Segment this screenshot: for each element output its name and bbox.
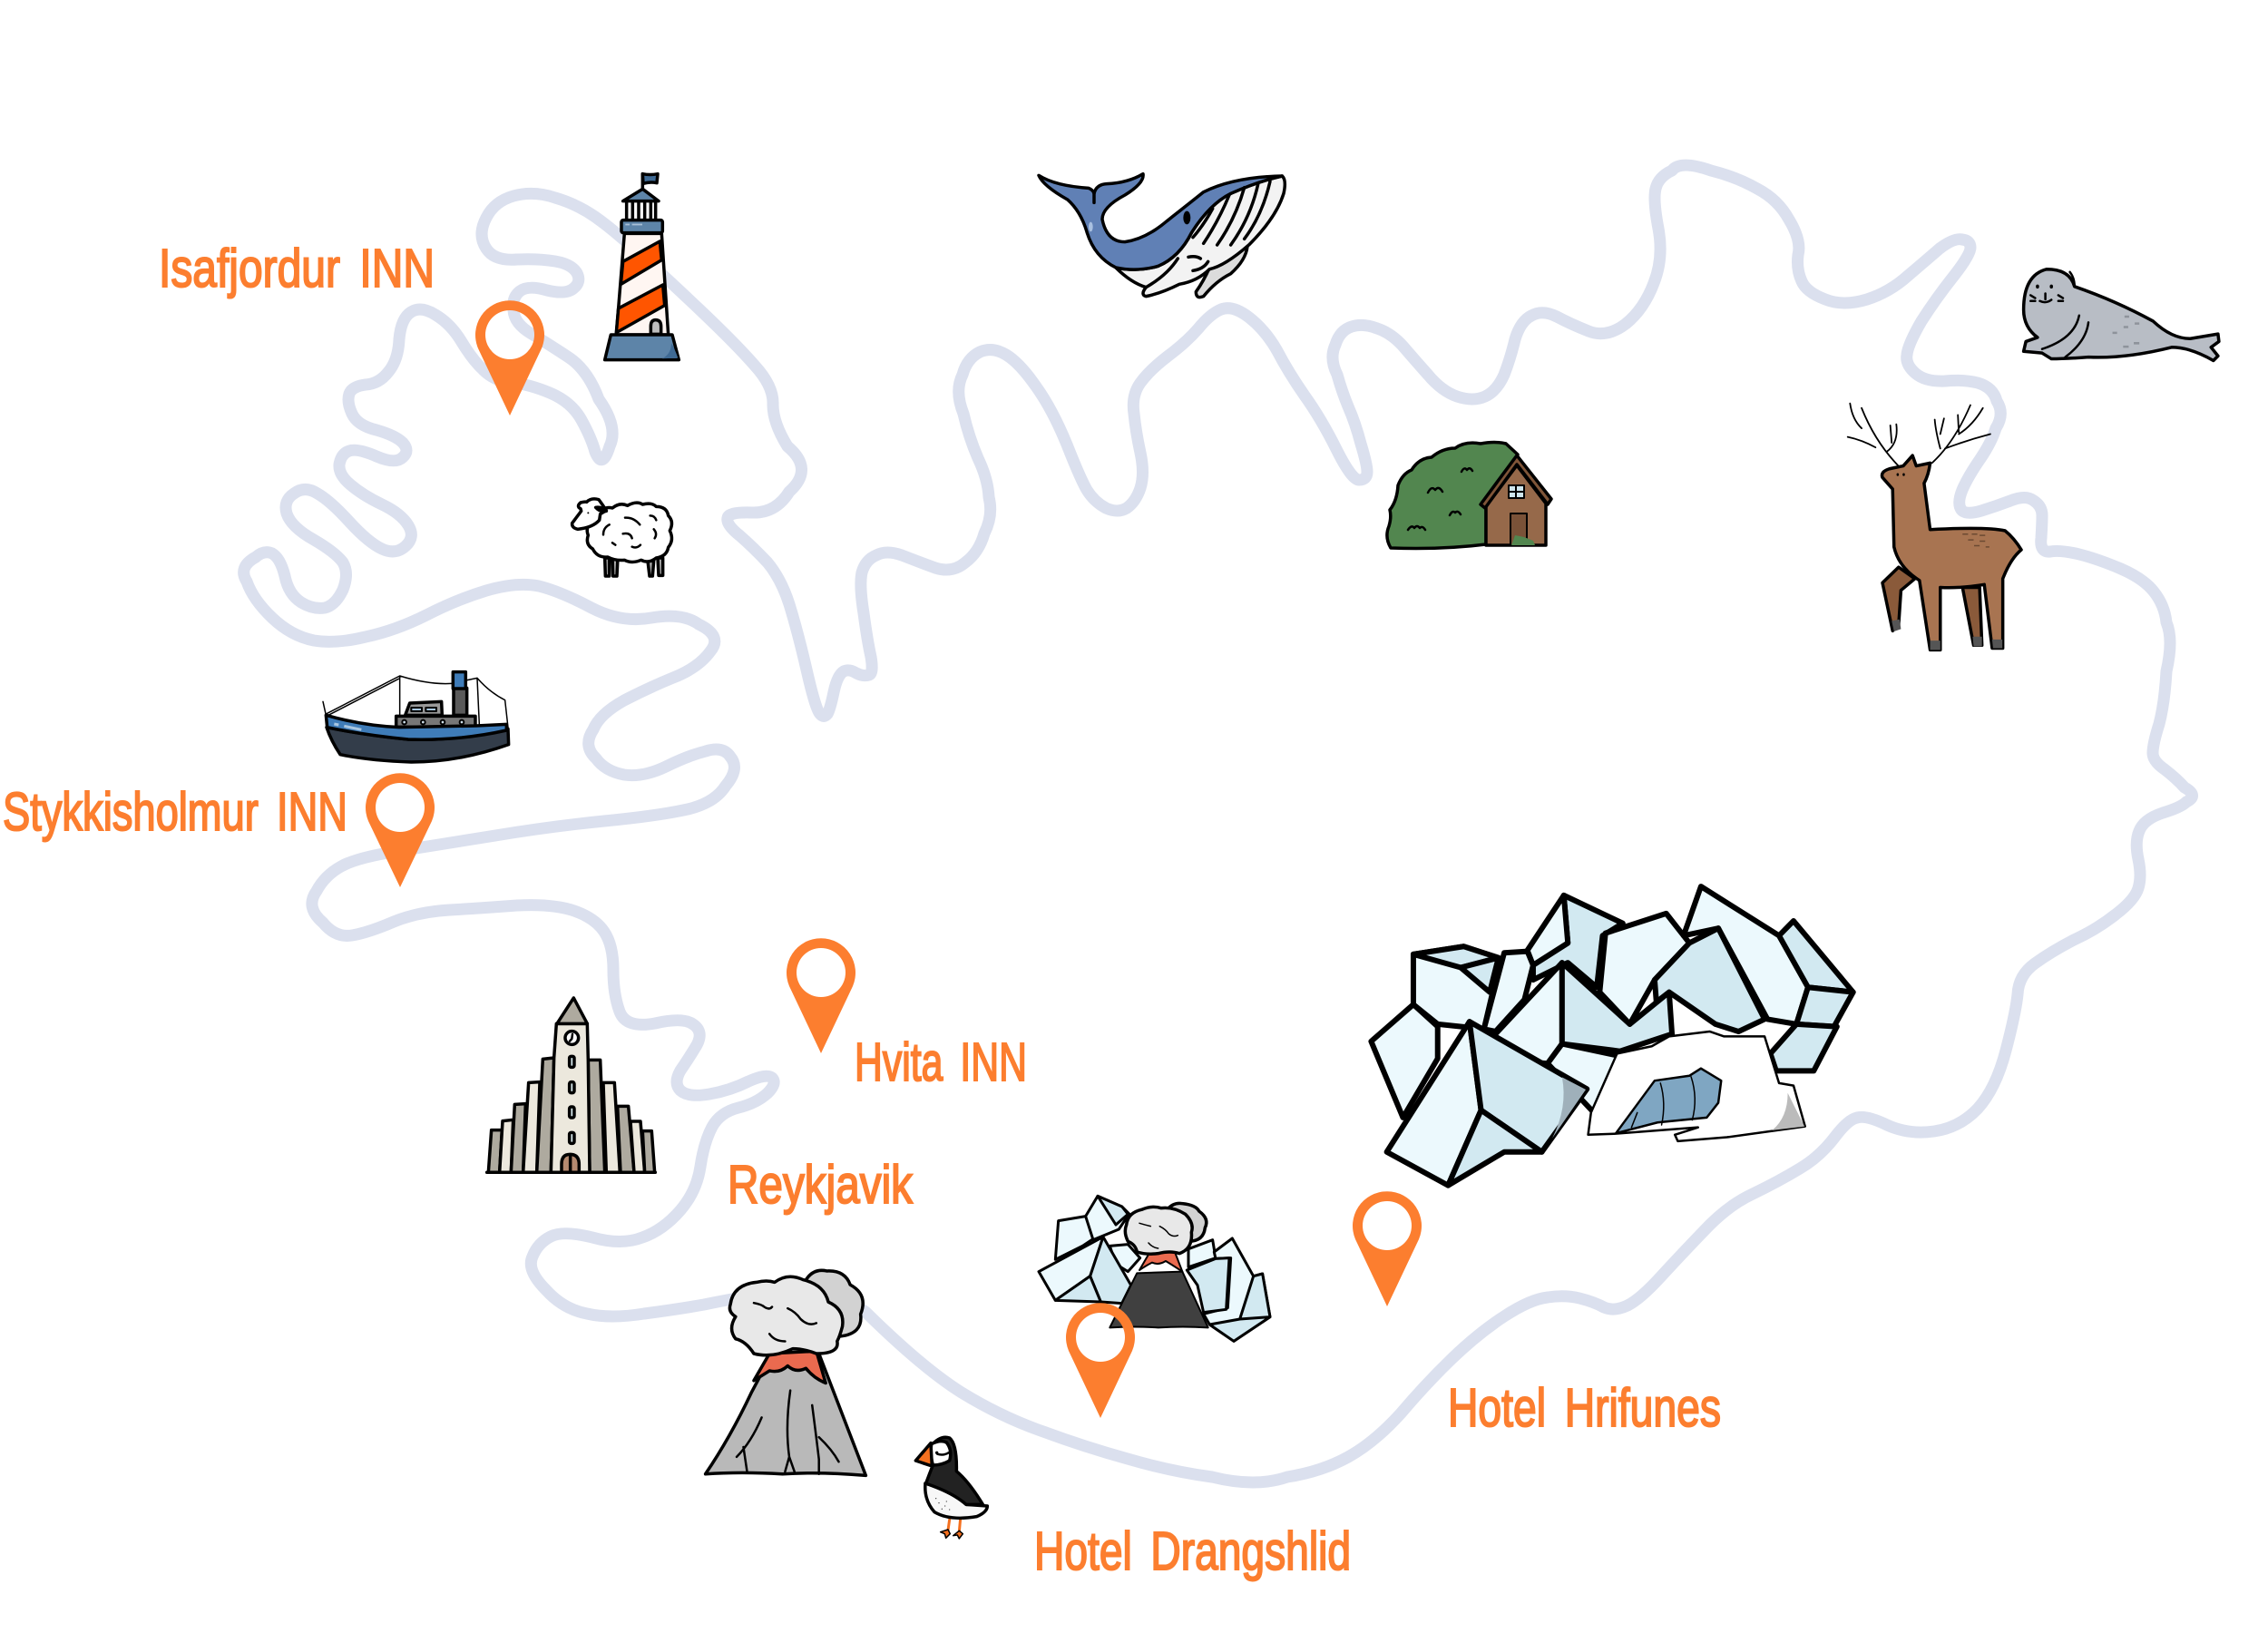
map: Iceland coastline — [244, 165, 2193, 1482]
label: Hotel Hrifunes: Hotel Hrifunes — [1448, 1378, 1721, 1438]
map pin: Stykkisholmur — [366, 773, 435, 887]
label: Hvita INN: Hvita INN — [855, 1032, 1027, 1092]
icon: small glacier and volcano — [1039, 1196, 1270, 1341]
map pin: Isafjordur — [475, 300, 544, 416]
icon: Hallgrimskirkja church — [487, 998, 655, 1172]
icon: lighthouse — [605, 174, 679, 360]
map pin: Hvita — [787, 938, 855, 1053]
label: Hotel Drangshlid: Hotel Drangshlid — [1034, 1521, 1351, 1581]
icon: sheep — [572, 499, 671, 576]
map pin: Hotel Drangshlid — [1066, 1303, 1135, 1418]
icon: ice cave glacier — [1371, 886, 1853, 1186]
icon: turf house — [1387, 443, 1551, 548]
label: Stykkisholmur INN: Stykkisholmur INN — [3, 782, 347, 842]
icon: puffin — [915, 1437, 987, 1539]
icon: fishing boat — [323, 672, 509, 762]
icon: volcano — [706, 1270, 865, 1475]
map pin: Hotel Hrifunes — [1353, 1191, 1422, 1306]
label: Isafjordur INN: Isafjordur INN — [159, 239, 435, 298]
icon: seal — [2024, 269, 2219, 360]
icon: reindeer — [1848, 404, 2021, 650]
label: Reykjavik: Reykjavik — [728, 1155, 913, 1215]
icon: whale — [1039, 174, 1285, 298]
